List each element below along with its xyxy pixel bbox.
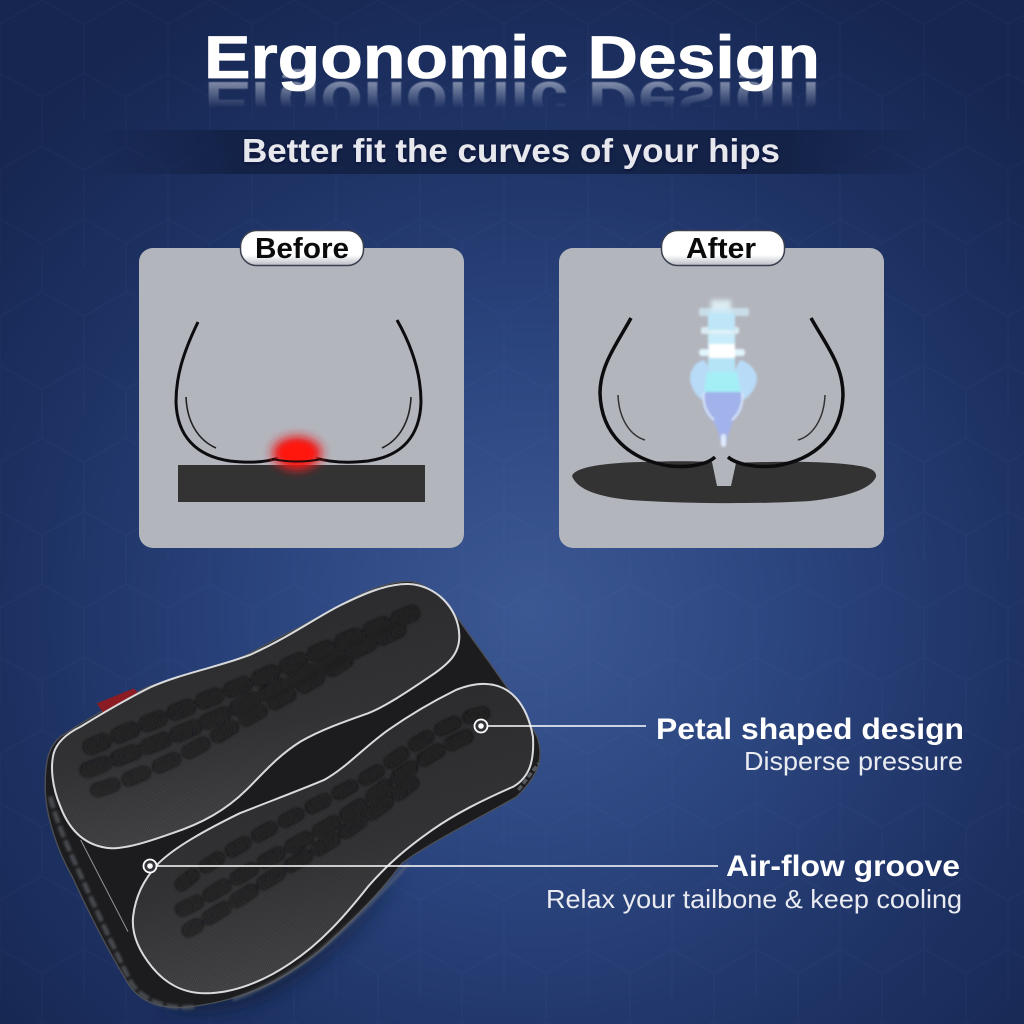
title: Ergonomic Design bbox=[204, 24, 820, 91]
right inner curve bbox=[798, 395, 825, 440]
callout: petal shaped design: Disperse pressure bbox=[744, 746, 963, 776]
cushion base bbox=[45, 582, 540, 1008]
label: after: After bbox=[686, 233, 756, 265]
leader line bbox=[487, 725, 646, 727]
seat cushion photo bbox=[45, 582, 540, 1014]
marker bbox=[474, 720, 488, 732]
left hip outline bbox=[600, 318, 715, 467]
left inner curve bbox=[618, 395, 645, 440]
right hip outline bbox=[316, 320, 421, 462]
stitch line bbox=[81, 840, 128, 932]
subtitle band bbox=[90, 130, 934, 174]
panel: after bbox=[559, 248, 884, 548]
callout text: Petal shaped design bbox=[656, 713, 964, 746]
ventilation holes bbox=[172, 713, 483, 930]
leader line bbox=[156, 865, 718, 867]
marker bbox=[144, 860, 156, 872]
callout: air-flow groove: Relax your tailbone & keep cooling bbox=[546, 884, 962, 914]
woven side edge bbox=[50, 797, 196, 1007]
callout: petal shaped design bbox=[474, 713, 964, 776]
ventilation holes bbox=[87, 613, 412, 790]
label: after bbox=[662, 230, 784, 266]
subtitle band: Better fit the curves of your hips bbox=[242, 132, 780, 169]
pressure hot spot bbox=[272, 436, 322, 470]
callout: air-flow groove bbox=[144, 850, 962, 914]
right hip outline bbox=[728, 318, 843, 467]
cushion shadow bbox=[158, 870, 402, 1014]
callout text: Air-flow groove bbox=[726, 850, 960, 883]
left hip outline bbox=[176, 322, 278, 462]
flat cushion bar bbox=[178, 465, 425, 502]
glowing spine and pelvis bbox=[690, 300, 757, 448]
title: Ergonomic Design bbox=[204, 69, 820, 136]
left inner curve bbox=[186, 397, 216, 448]
title bbox=[204, 24, 820, 136]
label: before: Before bbox=[255, 233, 349, 265]
red tag bbox=[97, 688, 140, 713]
contoured cushion bbox=[572, 461, 876, 503]
label: before bbox=[240, 230, 364, 266]
right inner curve bbox=[382, 397, 411, 448]
panel: before bbox=[139, 248, 464, 548]
lower petal pad bbox=[133, 684, 533, 993]
upper petal pad bbox=[52, 584, 459, 848]
